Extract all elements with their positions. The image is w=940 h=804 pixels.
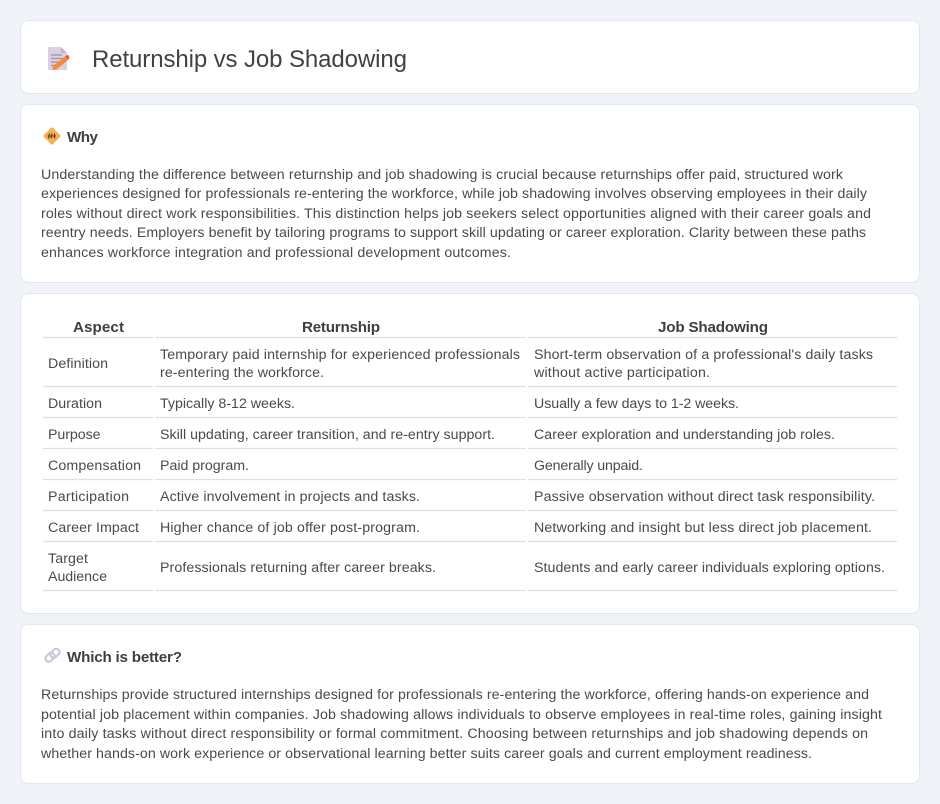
row: compensation: [48, 458, 643, 474]
icon: link: [44, 647, 61, 663]
icon: warning diamond: [44, 128, 60, 144]
row: participation: Passive observation without direct task responsibility.: [534, 489, 875, 505]
text block: why: [41, 167, 871, 261]
row: target audience: Professionals returning after career breaks.: [160, 560, 436, 576]
table header row: Returnship: [302, 319, 380, 336]
row: definition: Short-term observation of a professional's daily tasks: [534, 347, 873, 363]
row: participation: [48, 489, 875, 505]
text block: why: enhances workforce integration and professional development outcomes.: [41, 245, 511, 261]
text block: which is better: into daily tasks without direct responsibility or formal commitment. Choosing between returnships and job shadowing depends on: [41, 726, 868, 742]
text block: which is better: potential job placement within companies. Job shadowing allows individuals to observe employees in real-time roles, gaining insight: [41, 707, 882, 723]
title: Returnship vs Job Shadowing: [92, 46, 407, 73]
text block: which is better: whether hands-on work experience or observational learning better suits career goals and current employment readiness.: [40, 746, 812, 762]
row: target audience: Target: [48, 551, 88, 567]
text block: which is better: Returnships provide structured internships designed for professionals re-entering the workforce, offering hands-on experience and: [41, 687, 869, 703]
row: duration: Typically 8-12 weeks.: [160, 396, 295, 412]
row: target audience: Students and early career individuals exploring options.: [534, 560, 885, 576]
row: participation: Active involvement in projects and tasks.: [160, 489, 420, 505]
row: definition: re-entering the workforce.: [160, 365, 324, 381]
row: purpose: Purpose: [48, 427, 101, 443]
row: career impact: Networking and insight but less direct job placement.: [534, 520, 872, 536]
panel: which is better: [20, 624, 920, 784]
row: duration: [48, 396, 739, 412]
panel: header: [20, 20, 920, 94]
row: compensation: Generally unpaid.: [534, 458, 643, 474]
row: compensation: Compensation: [48, 458, 141, 474]
row: career impact: Higher chance of job offer post-program.: [160, 520, 420, 536]
row: purpose: [48, 427, 835, 443]
row: career impact: [48, 520, 872, 536]
row: definition: Temporary paid internship for experienced professionals: [160, 347, 520, 363]
heading: why: Why: [67, 129, 99, 146]
row: duration: Duration: [48, 396, 102, 412]
text block: why: Understanding the difference between returnship and job shadowing is crucial because returnships offer paid, structured work: [41, 167, 844, 183]
row: definition: [48, 347, 873, 381]
row: duration: Usually a few days to 1-2 weeks.: [534, 396, 739, 412]
row: definition: Definition: [48, 356, 108, 372]
table header row: Aspect: [73, 319, 124, 336]
row: purpose: Career exploration and understanding job roles.: [534, 427, 835, 443]
text block: which is better: [40, 687, 882, 762]
row: target audience: [48, 551, 885, 585]
panel: why: [20, 104, 920, 282]
text block: why: roles without direct work responsibilities. This distinction helps job seekers select opportunities aligned with their career goals and: [41, 206, 871, 222]
table header row: Job Shadowing: [658, 319, 768, 336]
row: purpose: Skill updating, career transition, and re-entry support.: [160, 427, 495, 443]
text block: why: reentry needs. Employers benefit by tailoring programs to support skill updating or career exploration. Clarity between these paths: [41, 225, 866, 241]
text block: why: experiences designed for professionals re-entering the workforce, while job shadowing involves observing employees in their daily: [41, 186, 868, 202]
heading: which is better: Which is better?: [67, 649, 182, 666]
row: compensation: Paid program.: [160, 458, 249, 474]
row: participation: Participation: [48, 489, 129, 505]
row: target audience: Audience: [48, 569, 107, 585]
table header row: [73, 319, 768, 336]
panel: comparison table: [20, 294, 920, 614]
row: definition: without active participation.: [533, 365, 710, 381]
icon: document with pencil: [48, 47, 70, 70]
row: career impact: Career Impact: [48, 520, 139, 536]
